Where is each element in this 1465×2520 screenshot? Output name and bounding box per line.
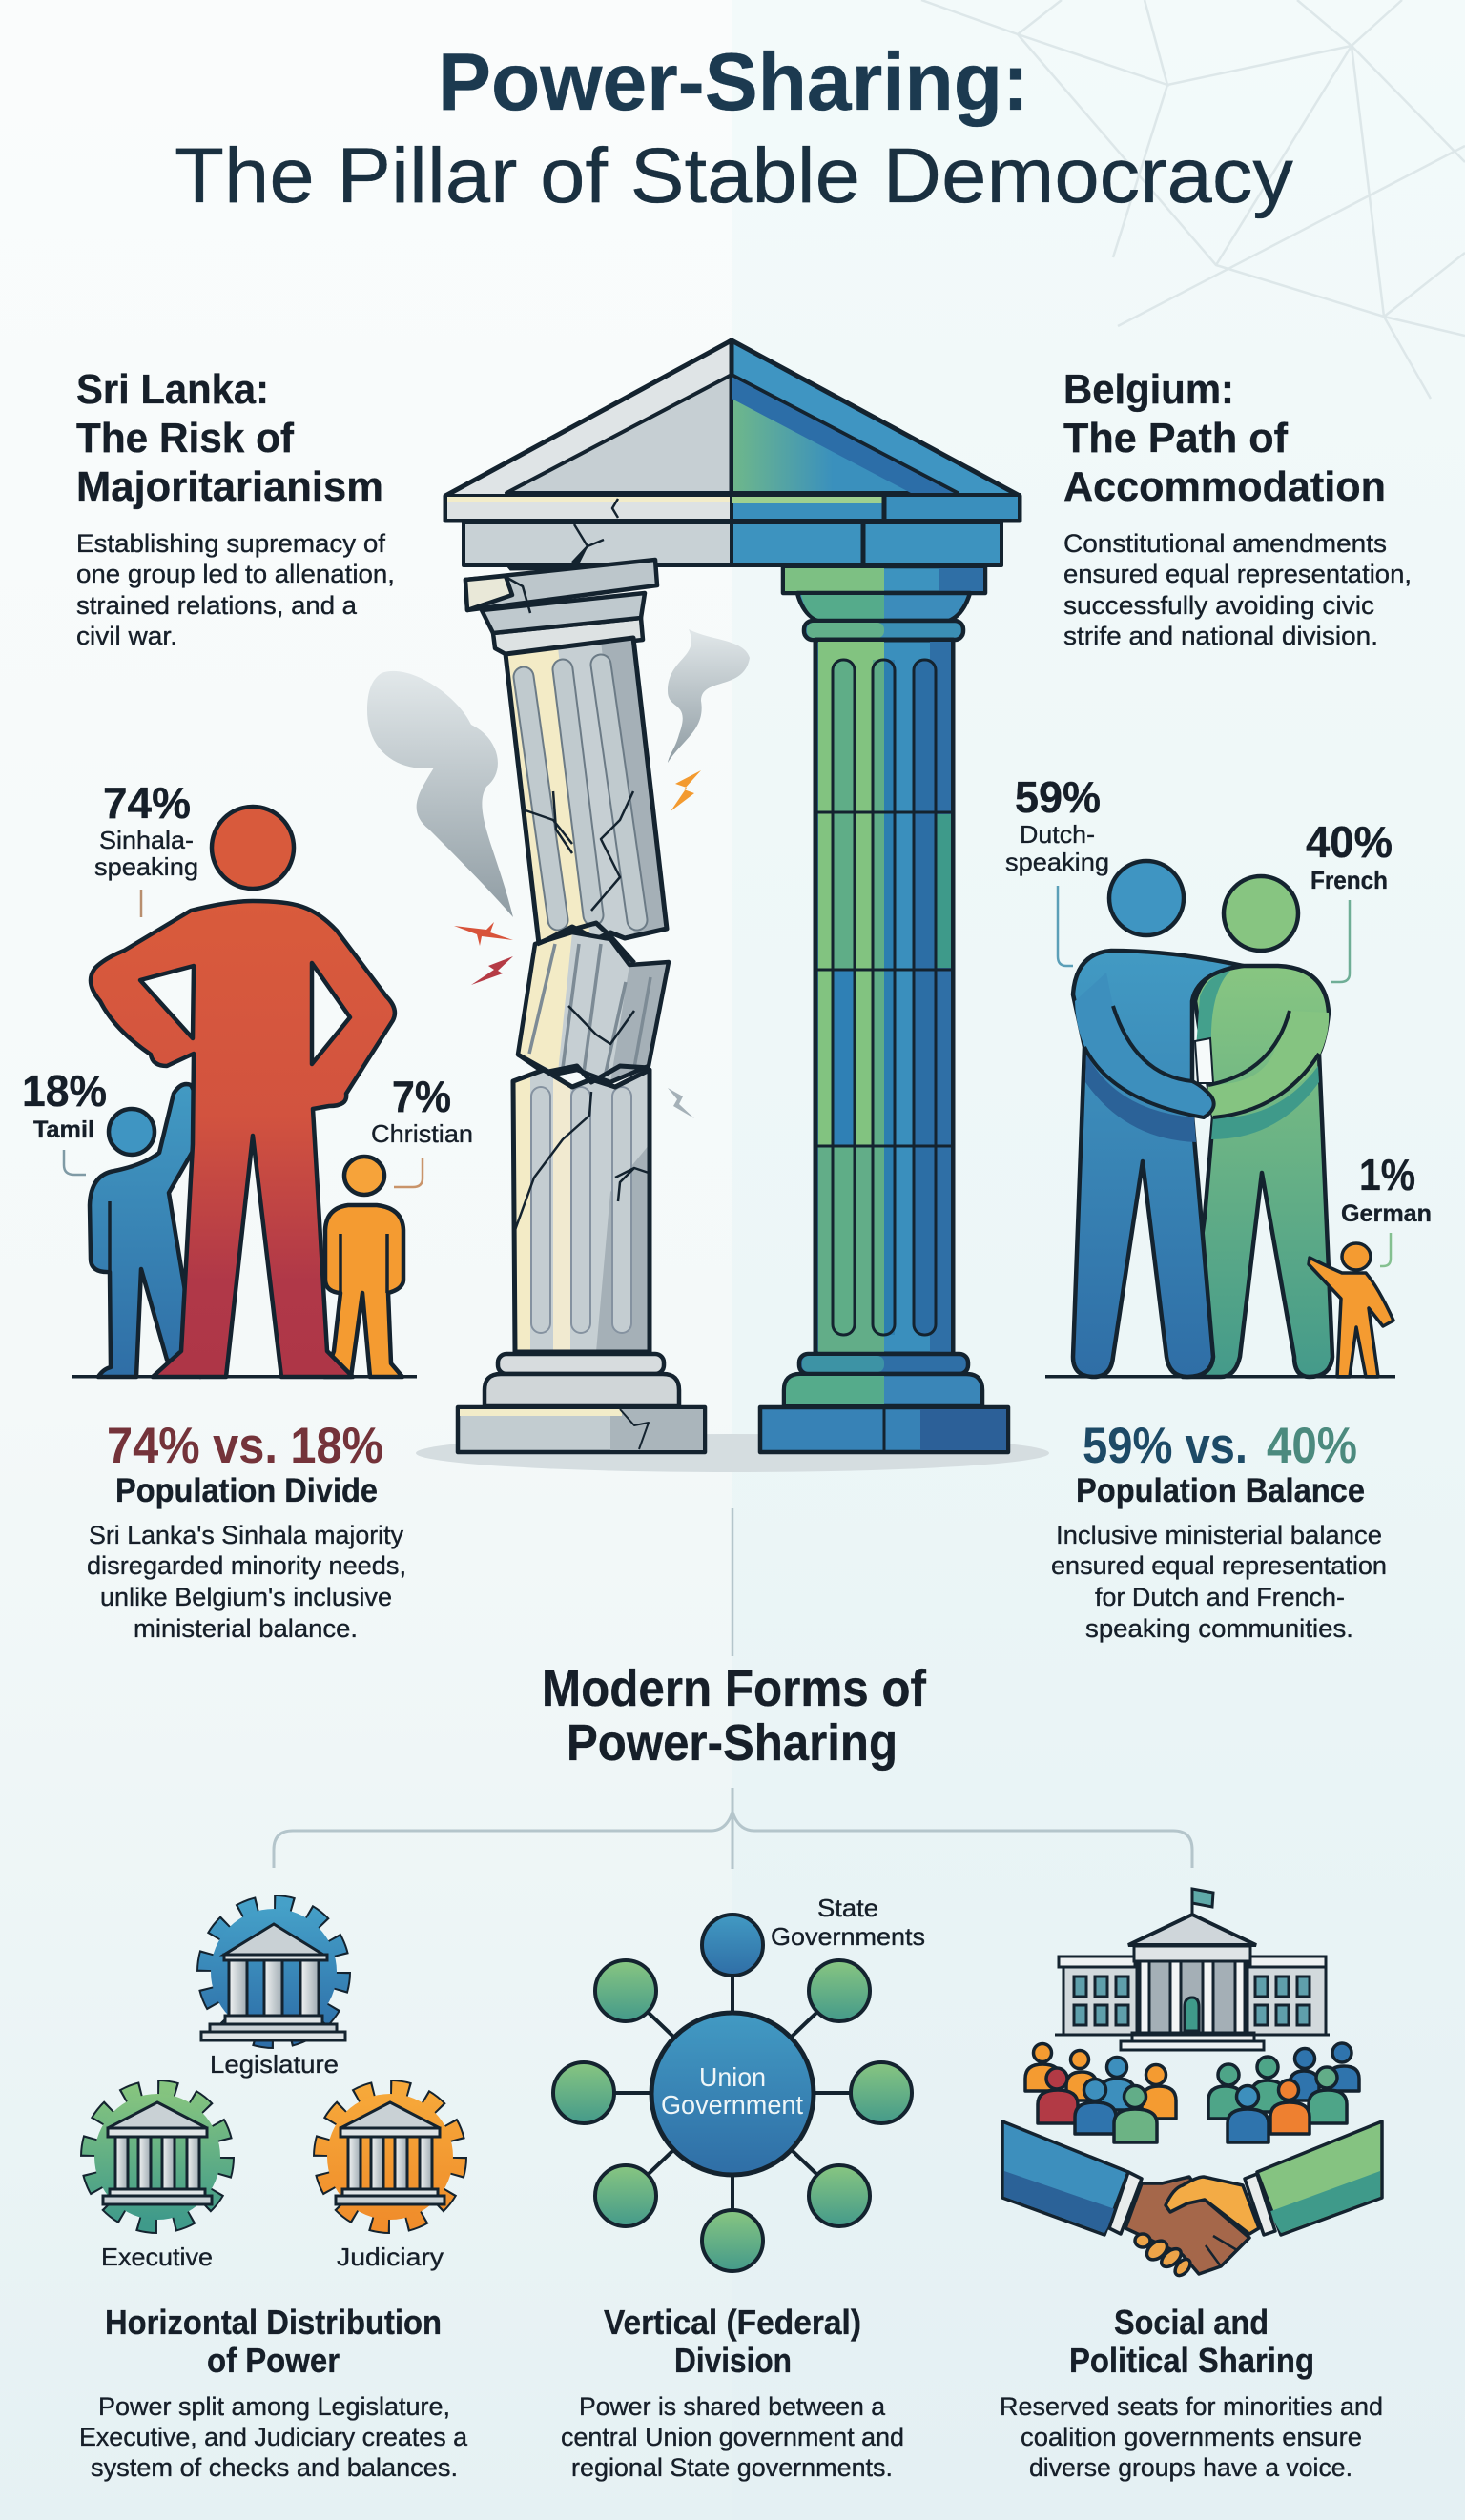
text block: social and political sharing: diverse groups have a voice. bbox=[1029, 2453, 1352, 2482]
label: 1% German bbox=[1341, 1150, 1432, 1266]
label: state governments bbox=[771, 1894, 925, 1951]
panel: Belgium heading and text: The Path of bbox=[1063, 415, 1288, 461]
icon: legislature gear bbox=[201, 1905, 345, 2040]
left base bbox=[458, 1354, 705, 1452]
right capital bbox=[783, 566, 985, 640]
roof and entablature bbox=[445, 340, 1020, 565]
stat block: population divide: unlike Belgium's inclusive bbox=[100, 1583, 392, 1611]
text block: vertical division bbox=[561, 2303, 904, 2482]
icon: judiciary gear bbox=[323, 2090, 457, 2223]
heading: modern forms: Modern Forms of bbox=[542, 1660, 927, 1717]
panel: Sri Lanka heading and text: Majoritarianism bbox=[76, 463, 383, 510]
text block: vertical division: regional State governments. bbox=[571, 2453, 893, 2482]
left shaft segment 3 bbox=[513, 1070, 650, 1352]
panel: Belgium heading and text: successfully avoiding civic bbox=[1063, 591, 1374, 620]
label: 7% Christian bbox=[371, 1072, 473, 1187]
right shaft bbox=[815, 640, 953, 1354]
stat block: population balance: 40% bbox=[1267, 1418, 1357, 1474]
label: 1% German: 1% bbox=[1359, 1150, 1415, 1199]
figure: 40% French (green) bbox=[1183, 876, 1332, 1377]
smoke: right bbox=[668, 629, 750, 763]
icon: executive gear bbox=[91, 2090, 224, 2223]
title: Power-Sharing: bbox=[438, 37, 1029, 128]
network decoration bbox=[921, 0, 1465, 399]
heading: modern forms: Power-Sharing bbox=[567, 1714, 898, 1772]
stat block: population balance: speaking communities. bbox=[1085, 1614, 1353, 1643]
stat block: population balance: Population Balance bbox=[1076, 1472, 1365, 1509]
ground line: left bbox=[72, 1375, 417, 1379]
stat block: population divide: 74% vs. 18% bbox=[107, 1418, 383, 1474]
stat block: population balance: 59% vs. bbox=[1083, 1418, 1248, 1474]
fracture lines bbox=[506, 499, 650, 1082]
panel: Sri Lanka heading and text: strained relations, and a bbox=[76, 591, 358, 620]
panel: Belgium heading and text: Constitutional amendments bbox=[1063, 529, 1387, 558]
ground line: right bbox=[1045, 1375, 1395, 1379]
label: 59% Dutch-speaking: Dutch- bbox=[1020, 820, 1095, 849]
label: 74% Sinhala-speaking: Sinhala- bbox=[99, 826, 194, 854]
title: The Pillar of Stable Democracy bbox=[175, 133, 1293, 219]
panel: Sri Lanka heading and text bbox=[76, 366, 395, 650]
label: 74% Sinhala-speaking: speaking bbox=[94, 852, 198, 881]
text block: social and political sharing: Social and bbox=[1114, 2303, 1269, 2342]
stat block: population balance: Inclusive ministerial balance bbox=[1056, 1521, 1382, 1549]
text block: horizontal distribution: of Power bbox=[207, 2341, 340, 2380]
text block: vertical division: central Union government and bbox=[561, 2423, 904, 2451]
text block: horizontal distribution: Executive, and Judiciary creates a bbox=[79, 2423, 468, 2451]
title bbox=[175, 37, 1293, 219]
text block: social and political sharing: Political Sharing bbox=[1069, 2341, 1314, 2380]
figure: 74% Sinhala (red) bbox=[91, 807, 395, 1377]
centre connector line bbox=[732, 1508, 733, 1656]
figure: 18% Tamil (blue) bbox=[90, 1084, 202, 1377]
text block: vertical division: Division bbox=[674, 2341, 792, 2380]
hub label: Union bbox=[699, 2062, 766, 2092]
label: 74% Sinhala-speaking: 74% bbox=[103, 778, 191, 828]
text block: vertical division: Vertical (Federal) bbox=[604, 2303, 861, 2342]
stat block: population balance: for Dutch and French- bbox=[1095, 1583, 1345, 1611]
icon: crowd, right group bbox=[1208, 2043, 1359, 2142]
panel: Sri Lanka heading and text: civil war. bbox=[76, 622, 177, 650]
panel: Belgium heading and text: strife and national division. bbox=[1063, 622, 1378, 650]
stat block: population divide: ministerial balance. bbox=[134, 1614, 358, 1643]
icon: handshake bbox=[1002, 2121, 1382, 2279]
panel: Belgium heading and text: Accommodation bbox=[1063, 463, 1386, 510]
panel: Sri Lanka heading and text: Establishing supremacy of bbox=[76, 529, 386, 558]
label: 40% French bbox=[1306, 817, 1393, 982]
label: 18% Tamil bbox=[22, 1066, 107, 1175]
label: judiciary: Judiciary bbox=[337, 2243, 444, 2271]
heading: modern forms bbox=[542, 1660, 927, 1772]
stat block: population balance bbox=[1051, 1418, 1387, 1643]
panel: Sri Lanka heading and text: one group led to allenation, bbox=[76, 560, 395, 588]
temple: broken and sound pillars bbox=[445, 340, 1020, 1452]
text block: social and political sharing bbox=[1000, 2303, 1383, 2482]
stat block: population balance: ensured equal representation bbox=[1051, 1551, 1387, 1580]
label: 40% French: 40% bbox=[1306, 817, 1393, 867]
text block: horizontal distribution: Horizontal Distribution bbox=[105, 2303, 442, 2342]
stat block: population divide: disregarded minority needs, bbox=[87, 1551, 406, 1580]
figure: 7% Christian (orange) bbox=[324, 1157, 403, 1377]
left capital bbox=[465, 560, 657, 654]
text block: horizontal distribution: system of checks and balances. bbox=[91, 2453, 458, 2482]
label: state governments: State bbox=[817, 1894, 878, 1922]
icon: government building bbox=[1055, 1888, 1330, 2050]
label: 18% Tamil: Tamil bbox=[33, 1117, 94, 1143]
diagram: federal hub and spokes bbox=[553, 1915, 912, 2271]
label: 40% French: French bbox=[1310, 866, 1388, 894]
panel: Belgium heading and text: Belgium: bbox=[1063, 366, 1234, 413]
icon: crowd, left group bbox=[1025, 2044, 1176, 2142]
label: 18% Tamil: 18% bbox=[22, 1066, 107, 1116]
text block: social and political sharing: Reserved seats for minorities and bbox=[1000, 2392, 1383, 2421]
left shaft segment 2 bbox=[518, 932, 669, 1082]
label: executive: Executive bbox=[101, 2243, 213, 2271]
stat block: population divide: Sri Lanka's Sinhala majority bbox=[89, 1521, 403, 1549]
panel: Sri Lanka heading and text: The Risk of bbox=[76, 415, 294, 461]
label: 1% German: German bbox=[1341, 1200, 1432, 1227]
label: state governments: Governments bbox=[771, 1922, 925, 1951]
icon: grey spark bbox=[668, 1088, 694, 1118]
label: 74% Sinhala-speaking bbox=[94, 778, 198, 917]
label: 59% Dutch-speaking: speaking bbox=[1005, 848, 1109, 876]
panel: Belgium heading and text: ensured equal representation, bbox=[1063, 560, 1412, 588]
right base bbox=[760, 1354, 1008, 1452]
bracket connector bbox=[274, 1788, 1192, 1869]
label: 7% Christian: 7% bbox=[392, 1072, 451, 1121]
label: 59% Dutch-speaking bbox=[1005, 772, 1109, 966]
ground shadow under temple bbox=[416, 1434, 1049, 1472]
icon: red sparks bbox=[454, 922, 513, 985]
smoke: left bbox=[367, 671, 513, 917]
figure: 59% Dutch (blue) bbox=[1073, 861, 1243, 1377]
label: 59% Dutch-speaking: 59% bbox=[1015, 772, 1101, 822]
text block: horizontal distribution: Power split among Legislature, bbox=[98, 2392, 450, 2421]
hub label: Government bbox=[661, 2090, 803, 2120]
arms embracing bbox=[1075, 973, 1329, 1117]
stat block: population divide: Population Divide bbox=[115, 1472, 378, 1509]
hub label bbox=[661, 2062, 803, 2120]
panel: Sri Lanka heading and text: Sri Lanka: bbox=[76, 366, 269, 413]
gap between figures bbox=[1195, 1038, 1213, 1083]
text block: social and political sharing: coalition governments ensure bbox=[1021, 2423, 1362, 2451]
left shaft segment 1 bbox=[506, 638, 667, 944]
text block: horizontal distribution bbox=[79, 2303, 468, 2482]
figure: 1% German (orange) bbox=[1309, 1243, 1393, 1377]
label: legislature: Legislature bbox=[210, 2050, 339, 2079]
label: 7% Christian: Christian bbox=[371, 1119, 473, 1148]
stat block: population divide bbox=[87, 1418, 406, 1643]
panel: Belgium heading and text bbox=[1063, 366, 1412, 650]
text block: vertical division: Power is shared between a bbox=[579, 2392, 886, 2421]
icon: orange spark bbox=[671, 770, 701, 811]
